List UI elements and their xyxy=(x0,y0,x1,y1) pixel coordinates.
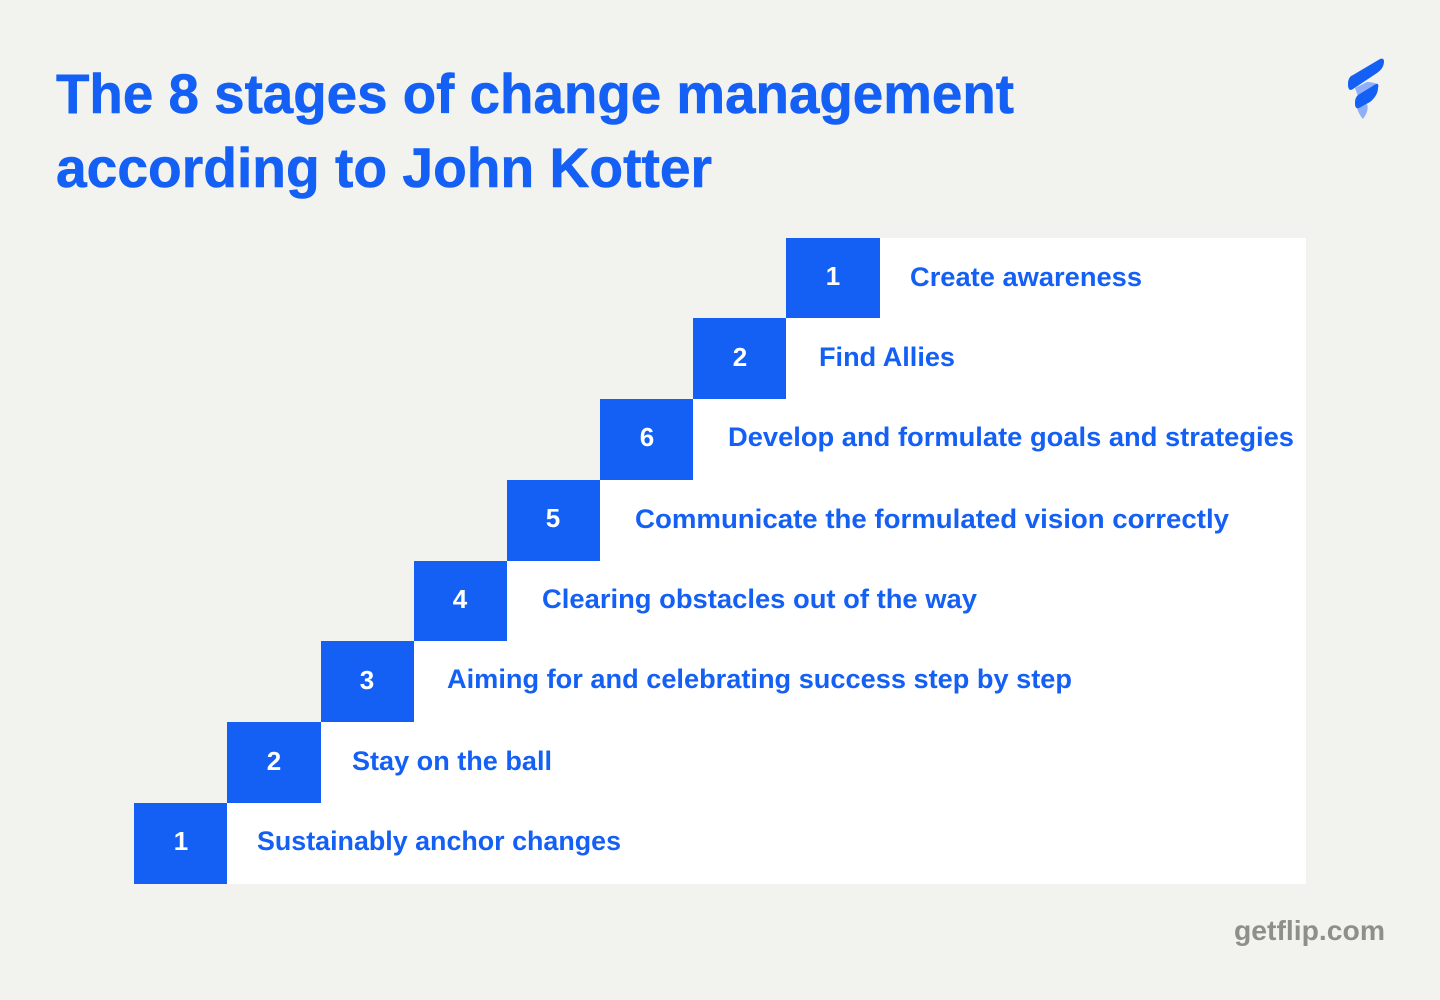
step 2: Stay on the ball: 2 xyxy=(267,746,281,776)
step 6: Develop and formulate goals and strategies: 6 xyxy=(640,422,654,452)
step 1: Create awareness: 1 xyxy=(826,261,840,291)
step 1: Create awareness xyxy=(786,238,1142,318)
step 6: Develop and formulate goals and strategies: Develop and formulate goals and strategies xyxy=(728,422,1294,452)
step 3: Aiming for and celebrating success step by step: 3 xyxy=(360,665,374,695)
step 2: Find Allies: Find Allies xyxy=(819,342,955,372)
title: according to John Kotter xyxy=(56,136,712,199)
step 2: Stay on the ball: Stay on the ball xyxy=(352,746,552,776)
step 1: Sustainably anchor changes: Sustainably anchor changes xyxy=(257,826,621,856)
staircase white background xyxy=(134,238,1306,884)
step 3: Aiming for and celebrating success step by step xyxy=(321,641,1072,722)
step 3: Aiming for and celebrating success step by step: Aiming for and celebrating success step by step xyxy=(447,664,1072,694)
step 5: Communicate the formulated vision correctly xyxy=(507,480,1229,561)
step 4: Clearing obstacles out of the way: 4 xyxy=(453,584,468,614)
step 5: Communicate the formulated vision correctly: Communicate the formulated vision correctly xyxy=(635,504,1229,534)
icon: flip logo xyxy=(1348,59,1384,119)
title xyxy=(56,62,1014,199)
step 6: Develop and formulate goals and strategies xyxy=(600,399,1294,480)
step 2: Find Allies: 2 xyxy=(733,342,747,372)
step 4: Clearing obstacles out of the way xyxy=(414,561,977,641)
step 1: Sustainably anchor changes: 1 xyxy=(174,826,188,856)
step 1: Sustainably anchor changes xyxy=(134,803,621,884)
step 2: Find Allies xyxy=(693,318,955,399)
step 5: Communicate the formulated vision correctly: 5 xyxy=(546,503,560,533)
step 4: Clearing obstacles out of the way: Clearing obstacles out of the way xyxy=(542,584,977,614)
step 2: Stay on the ball xyxy=(227,722,552,803)
footer: getflip.com: getflip.com xyxy=(1234,915,1385,946)
title: The 8 stages of change management xyxy=(56,62,1014,125)
step 1: Create awareness: Create awareness xyxy=(910,262,1142,292)
